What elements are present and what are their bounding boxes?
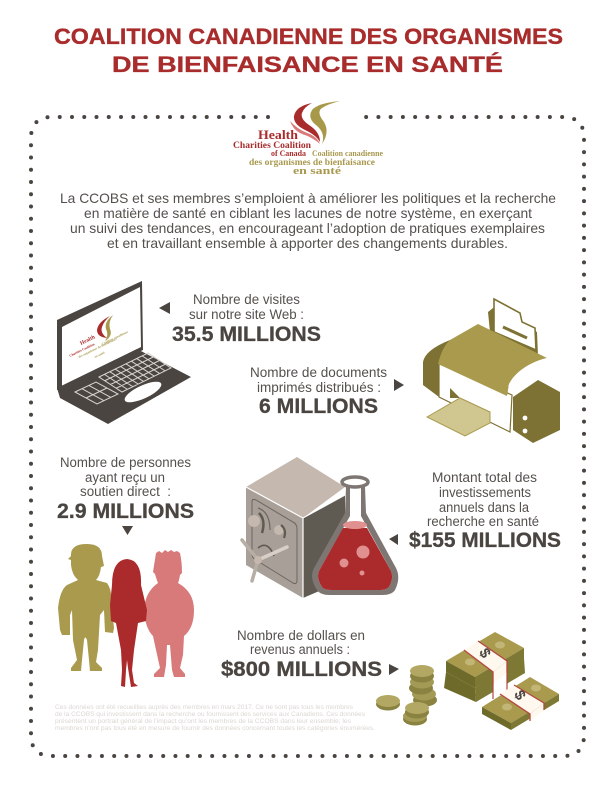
laptop keyboard bbox=[99, 353, 171, 392]
heavy man bbox=[144, 550, 194, 677]
label bbox=[250, 365, 387, 395]
label: Nombre de visites bbox=[193, 292, 300, 307]
stat: website visits bbox=[159, 292, 321, 346]
footnote: de la CCOBS qui investissent dans la recherche ou fournissent des services aux Canadiens. Ces données bbox=[55, 711, 365, 718]
icon: printer bbox=[423, 299, 560, 443]
arrow bbox=[389, 664, 399, 675]
safe bbox=[242, 457, 345, 598]
single bundle bbox=[482, 677, 559, 730]
value: 6 MILLIONS bbox=[259, 395, 378, 418]
man with cap bbox=[58, 544, 114, 671]
laptop screen logo: Health bbox=[79, 334, 96, 347]
logo text: Health bbox=[258, 127, 299, 142]
safe top bbox=[246, 457, 345, 518]
label: Nombre de dollars en bbox=[237, 628, 365, 643]
label: imprimés distribués : bbox=[257, 380, 381, 395]
label: revenus annuels : bbox=[250, 642, 350, 657]
icon: money bbox=[376, 632, 559, 730]
label: Nombre de personnes bbox=[60, 455, 191, 470]
footnote: présentent un portrait général de l’impact qu’ont les membres de la CCOBS dans leur ensemble; les bbox=[55, 718, 351, 725]
safe handle bbox=[242, 540, 258, 581]
upper stack bundle: $ bbox=[475, 645, 494, 662]
lower stack bundle bbox=[444, 658, 525, 702]
value: $800 MILLIONS bbox=[221, 658, 382, 681]
laptop screen logo: en santé bbox=[94, 350, 106, 359]
stat: research investment bbox=[389, 470, 561, 552]
laptop screen logo: Charities Coalition bbox=[69, 342, 95, 358]
single bundle: $ bbox=[510, 687, 529, 704]
bubbles bbox=[356, 546, 370, 558]
safe front bbox=[246, 487, 303, 598]
laptop screen bbox=[62, 287, 141, 387]
flask liquid bbox=[318, 528, 392, 590]
logo text: en santé bbox=[293, 165, 341, 177]
flask rim bbox=[342, 477, 368, 487]
woman with long hair bbox=[110, 559, 147, 687]
stat: printed documents bbox=[250, 365, 404, 418]
label: investissements bbox=[439, 485, 531, 500]
label: Montant total des bbox=[432, 470, 537, 485]
logo text: of Canada bbox=[271, 148, 307, 158]
icon: safe and flask bbox=[242, 457, 398, 598]
footnote: membres n’ont pas tous été en mesure de fournir des données concernant toutes les catégories énumérées. bbox=[55, 725, 375, 732]
stat: people supported bbox=[57, 455, 194, 535]
intro paragraph: un suivi des tendances, en encourageant l’adoption de pratiques exemplaires bbox=[70, 220, 545, 236]
safe dials bbox=[258, 508, 270, 530]
label: ayant reçu un bbox=[85, 470, 165, 485]
printer top bbox=[438, 324, 547, 396]
label: annuels dans la bbox=[439, 500, 529, 515]
value: $155 MILLIONS bbox=[409, 529, 561, 552]
flask glass bbox=[312, 487, 398, 595]
icon: three people bbox=[58, 544, 194, 687]
upper stack bundle bbox=[446, 632, 524, 688]
footnote: Ces données ont été recueillies auprès des membres en mars 2017. Ce ne sont pas tous les membres bbox=[55, 704, 353, 711]
footnote bbox=[55, 704, 375, 732]
laptop screen logo bbox=[69, 315, 129, 359]
value: 2.9 MILLIONS bbox=[57, 500, 194, 523]
printer rear bbox=[423, 340, 450, 397]
label: soutien direct : bbox=[80, 484, 171, 499]
logo text: Coalition canadienne bbox=[312, 149, 383, 158]
intro paragraph: La CCOBS et ses membres s’emploient à améliorer les politiques et la recherche bbox=[60, 190, 556, 206]
label bbox=[60, 455, 191, 499]
arrow bbox=[159, 302, 170, 314]
laptop lid bbox=[57, 281, 143, 390]
flask bbox=[312, 477, 398, 595]
logo swooshes bbox=[290, 101, 340, 144]
printer front bbox=[439, 363, 512, 432]
output tray bbox=[427, 398, 490, 436]
value: 35.5 MILLIONS bbox=[172, 323, 321, 346]
coins bbox=[376, 665, 437, 726]
icon: laptop bbox=[57, 281, 191, 424]
laptop screen logo: des organismes de bienfaisance bbox=[78, 337, 118, 359]
label: sur notre site Web : bbox=[189, 307, 304, 322]
label bbox=[237, 628, 365, 657]
white highlight bbox=[510, 360, 547, 387]
intro paragraph bbox=[60, 190, 556, 251]
laptop base bbox=[57, 349, 191, 424]
paper tray back bbox=[488, 308, 538, 356]
logo text bbox=[233, 127, 383, 177]
sheet of paper bbox=[494, 299, 536, 350]
title: COALITION CANADIENNE DES ORGANISMES bbox=[54, 24, 563, 49]
arrow bbox=[389, 534, 398, 545]
label bbox=[427, 470, 539, 529]
intro paragraph: en matière de santé en ciblant les lacunes de notre système, en exerçant bbox=[84, 205, 532, 221]
laptop number pad bbox=[75, 382, 118, 404]
stat: annual revenue bbox=[221, 628, 399, 681]
arrow bbox=[122, 526, 133, 535]
logo text: Charities Coalition bbox=[233, 141, 312, 151]
title: DE BIENFAISANCE EN SANTÉ bbox=[112, 52, 503, 77]
laptop screen logo: Coalition canadienne bbox=[101, 330, 129, 346]
safe side bbox=[303, 495, 345, 598]
title bbox=[54, 24, 563, 77]
intro paragraph: et en travaillant ensemble à apporter des changements durables. bbox=[107, 235, 508, 251]
logo bbox=[233, 101, 383, 177]
logo text: des organismes de bienfaisance bbox=[249, 157, 375, 167]
dotted border bbox=[31, 117, 584, 756]
laptop trackpad bbox=[122, 378, 164, 406]
label: Nombre de documents bbox=[250, 365, 387, 380]
label: recherche en santé bbox=[427, 514, 539, 529]
safe door bbox=[252, 499, 297, 584]
label bbox=[189, 292, 304, 322]
printer side block bbox=[513, 380, 560, 443]
arrow bbox=[394, 379, 404, 391]
